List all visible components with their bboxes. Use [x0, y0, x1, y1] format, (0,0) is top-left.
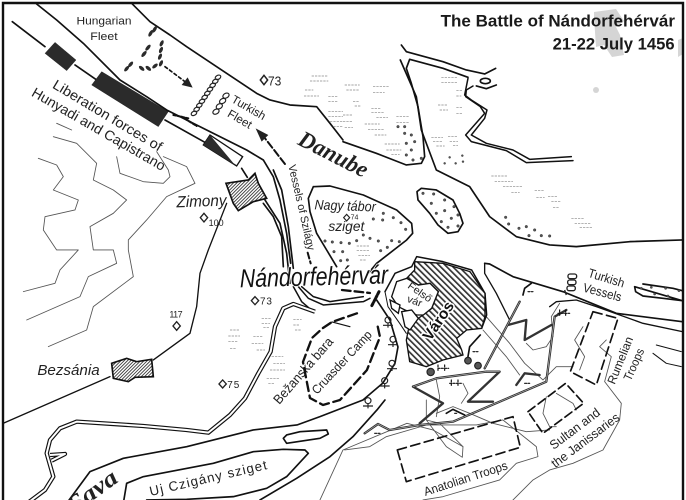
label: Crusader Camp: Cruasder Camp — [309, 328, 375, 397]
arrow: vessels of Szilágyi — [256, 128, 285, 164]
island dots — [324, 212, 407, 262]
Nagy tábor island and city name — [239, 170, 413, 312]
label: Turkish Fleet: Turkish — [229, 93, 268, 123]
Turkish vessels boats — [565, 274, 577, 295]
label: Hungarian Fleet line 2: Fleet — [90, 31, 119, 43]
label: height 73 — [260, 75, 281, 89]
label: vár: vár — [405, 294, 424, 310]
crusader camp upper dashes — [342, 290, 370, 293]
label: height 100: 100 — [209, 218, 224, 228]
curves under city name — [293, 287, 370, 312]
dashed route of vessels of Szilágyi — [308, 253, 311, 263]
label: height 74 — [344, 214, 359, 221]
contour lines — [23, 123, 195, 347]
small island with trees — [635, 284, 682, 301]
label: height 75: 75 — [227, 380, 240, 391]
fortress Felső vár and outer wall — [385, 257, 487, 367]
Bezsánia town — [112, 358, 153, 382]
label: Felső vár: Felső — [405, 281, 434, 305]
Hungarian relief forces — [45, 42, 243, 166]
label: height 117 — [169, 310, 183, 330]
label: Liberation forces: Liberation forces of — [50, 76, 166, 154]
label: Város: Város — [420, 298, 458, 344]
map: south-west section with Sava — [25, 290, 463, 500]
marsh marks — [304, 76, 343, 127]
label: height 73: 73 — [260, 296, 272, 307]
label: Uj Czigány sziget: Uj Czigány sziget — [148, 457, 269, 499]
label: height 73: 73 — [268, 75, 281, 89]
label: height 75 — [219, 380, 240, 391]
label: Danube: Danube — [293, 126, 373, 183]
title: The Battle of Nándorfehérvár — [441, 11, 675, 30]
river banks — [485, 263, 682, 367]
Sava channel double bank — [25, 300, 463, 500]
subtitle date: 21-22 July 1456 — [553, 34, 675, 53]
map: north-east section — [343, 11, 683, 247]
label: Hungarian Fleet: Hungarian — [76, 16, 131, 28]
map: Belgrade siege section — [309, 257, 682, 500]
city name: Nándorfehérvár — [239, 259, 390, 293]
road and banks by the city — [263, 170, 293, 268]
marsh marks — [343, 77, 593, 227]
teardrop island — [417, 188, 463, 233]
island forest dots — [397, 125, 551, 237]
Danube north bank and channels — [343, 45, 683, 247]
watermark smudges behind title — [593, 9, 683, 93]
label: height 73 — [251, 296, 272, 307]
label: Hunyadi and Capistrano: Hunyadi and Capistrano — [29, 84, 169, 174]
label: Sultan and: Sultan and — [547, 405, 603, 452]
river Danube banks — [3, 3, 343, 423]
crosses — [363, 317, 398, 408]
label: height 117: 117 — [169, 310, 183, 320]
label: Anatolian Troops: Anatolian Troops — [422, 459, 509, 499]
troop position: Anatolian — [397, 417, 520, 482]
troop camp symbols — [375, 292, 570, 433]
label: Bezsánia: Bezsánia — [37, 362, 100, 379]
label: height 74: 74 — [351, 214, 359, 221]
siege trenches — [365, 283, 566, 433]
crusader camp dashed line — [303, 313, 380, 405]
map: north-west section with Hungarian forces — [3, 3, 373, 423]
label: Nagy tábor: Nagy tábor — [314, 196, 377, 215]
label: the Janissaries: the Janissaries — [549, 410, 622, 471]
line crossing the camp — [332, 322, 350, 327]
marsh marks — [228, 318, 302, 383]
troop position: Rumelian — [570, 312, 618, 385]
Turkish fleet boats — [190, 74, 230, 117]
arrow: Hungarian fleet attack — [165, 67, 193, 88]
label: Turkish Vessels: Turkish — [586, 266, 626, 290]
label: Bežanska bara: Bežanska bara — [270, 334, 337, 407]
Hungarian fleet boats — [123, 25, 165, 72]
label: Troops: Troops — [621, 346, 647, 383]
label: vessels of Szilágyi: Vessels of Szilágy — [285, 164, 317, 252]
label: Rumelian: Rumelian — [604, 335, 636, 386]
label: Turkish Vessels line 2: Vessels — [582, 281, 623, 304]
label: Zimony: Zimony — [175, 193, 228, 211]
Nagy tábor outline — [308, 186, 413, 273]
captured boats — [173, 115, 197, 126]
troop position: Sultan — [528, 383, 584, 433]
Turkish cannons — [427, 357, 481, 376]
label: height 100 — [200, 213, 224, 228]
dam thick marks — [371, 292, 379, 307]
label: sziget: sziget — [328, 218, 365, 234]
thin terrain lines — [345, 303, 621, 500]
label: Turkish Fleet line 2: Fleet — [225, 107, 255, 132]
Zimony town — [226, 173, 267, 211]
